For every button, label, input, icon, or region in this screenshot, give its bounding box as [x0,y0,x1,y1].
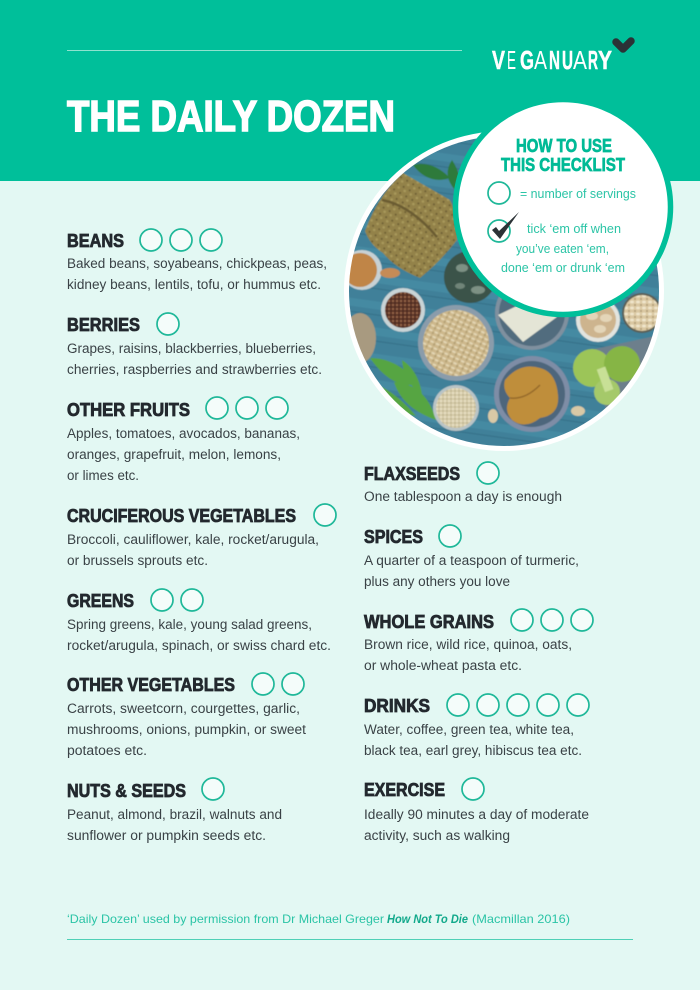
broccoli [573,346,640,405]
section: beans: Baked beans, soyabeans, chickpeas, peas, [67,256,327,271]
panel heading: HOW TO USE [516,136,612,156]
section: other vegetables: OTHER VEGETABLES [67,674,235,695]
logo: Veganuary: E [507,45,516,75]
slate under broccoli [594,336,652,408]
tick instructions: tick ‘em off when [527,222,621,236]
tick instructions [501,222,625,275]
tick instructions: you’ve eaten ‘em, [516,242,609,256]
section: drinks: DRINKS [364,695,430,716]
food photo circle [340,130,670,460]
pistachios [576,298,620,342]
logo: Veganuary: R [588,45,598,75]
leaves [413,160,459,190]
peanut butter bowl [494,356,570,432]
section: nuts and seeds: NUTS & SEEDS [67,780,186,801]
section: other fruits [67,397,300,483]
section: whole grains [364,609,593,673]
logo: Veganuary: U [562,45,573,75]
section: other vegetables [67,673,306,758]
section: drinks [364,694,589,758]
flax bowl [381,288,425,332]
bread [365,173,457,278]
panel heading: THIS CHECKLIST [501,155,625,175]
section: spices: A quarter of a teaspoon of turmeric, [364,553,579,568]
footer credit [67,912,570,926]
rice bowl [418,305,494,381]
panel: how to use this checklist [456,100,670,314]
footer credit: (Macmillan 2016) [472,912,570,926]
section: beans [67,229,327,292]
section: exercise: Ideally 90 minutes a day of moderate [364,807,589,822]
sunflower seeds [351,312,377,362]
footer credit: How Not To Die [387,912,468,926]
section: berries: BERRIES [67,314,140,335]
section: exercise: activity, such as walking [364,828,510,843]
logo: Veganuary: Y [598,45,612,75]
section: other fruits: oranges, grapefruit, melon, lemons, [67,447,281,462]
section: cruciferous vegetables: CRUCIFEROUS VEGETABLES [67,505,296,526]
section: flaxseeds: One tablespoon a day is enough [364,489,562,504]
section: greens: Spring greens, kale, young salad greens, [67,617,312,632]
title: THE DAILY DOZEN [67,92,395,141]
logo: Veganuary [492,41,631,75]
section: nuts and seeds: Peanut, almond, brazil, walnuts and [67,807,282,822]
section: beans: kidney beans, lentils, tofu, or hummus etc. [67,277,321,292]
tofu bowl [494,296,570,350]
tick instructions: done ‘em or drunk ‘em [501,261,625,275]
oats [622,293,662,333]
section: whole grains: or whole-wheat pasta etc. [364,658,522,673]
sesame bowl [433,385,479,431]
section: flaxseeds [364,462,562,504]
logo: Veganuary: V [492,45,505,75]
logo: Veganuary: N [549,45,560,75]
logo: Veganuary: A [573,45,588,75]
section: whole grains: WHOLE GRAINS [364,611,494,632]
section: drinks: black tea, earl grey, hibiscus tea etc. [364,743,582,758]
section: exercise [364,778,589,843]
icon: ticked circle [488,212,519,242]
section: greens: rocket/arugula, spinach, or swiss chard etc. [67,638,331,653]
section: other vegetables: Carrots, sweetcorn, courgettes, garlic, [67,701,300,716]
section: cruciferous vegetables [67,504,336,568]
footer credit: ‘Daily Dozen’ used by permission from Dr Michael Greger [67,912,384,926]
section: beans: BEANS [67,230,124,251]
section: whole grains: Brown rice, wild rice, quinoa, oats, [364,637,572,652]
servings key: = number of servings [520,187,636,201]
section: exercise: EXERCISE [364,779,445,800]
section: other fruits: or limes etc. [67,468,139,483]
section: spices: plus any others you love [364,574,510,589]
section: berries: cherries, raspberries and strawberries etc. [67,362,322,377]
logo: Veganuary: A [534,45,547,75]
section: berries [67,313,322,377]
section: spices: SPICES [364,526,423,547]
icon: logo heart tick [616,41,631,49]
icon: empty serving circle [488,182,510,204]
section: nuts and seeds: sunflower or pumpkin seeds etc. [67,828,266,843]
section: cruciferous vegetables: Broccoli, cauliflower, kale, rocket/arugula, [67,532,319,547]
panel heading [501,136,625,175]
section: greens [67,589,331,653]
header band [0,0,700,181]
logo: Veganuary: G [520,45,534,75]
section: spices [364,525,579,589]
section: greens: GREENS [67,590,134,611]
section: other vegetables: potatoes etc. [67,743,147,758]
section: nuts and seeds [67,778,282,843]
section: cruciferous vegetables: or brussels sprouts etc. [67,553,208,568]
section: other vegetables: mushrooms, onions, pumpkin, or sweet [67,722,306,737]
pumpkin seeds [444,251,496,303]
peanut shells [488,409,498,423]
section: drinks: Water, coffee, green tea, white tea, [364,722,574,737]
section: other fruits: Apples, tomatoes, avocados, bananas, [67,426,300,441]
peas [370,358,436,420]
almonds bowl [349,249,383,291]
section: flaxseeds: FLAXSEEDS [364,463,460,484]
section: berries: Grapes, raisins, blackberries, blueberries, [67,341,316,356]
section: other fruits: OTHER FRUITS [67,399,190,420]
